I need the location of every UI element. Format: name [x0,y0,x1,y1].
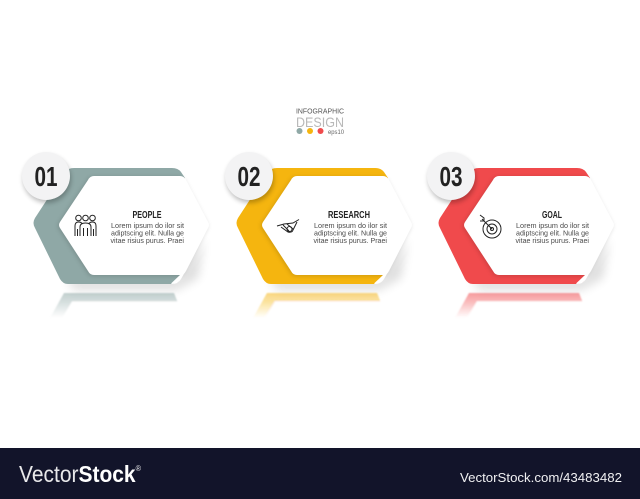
text block: research [314,221,388,245]
white lower rim [171,272,185,284]
footer bar [0,448,640,499]
reflection: goal [455,293,595,322]
card shadow: people [66,238,204,290]
heading: research: RESEARCH [328,209,370,221]
text block: people: vitae risius purus. Praei [110,236,184,245]
text block: research: vitae risius purus. Praei [314,236,387,245]
number badge: 02 [225,152,274,203]
icon: handshake [277,220,299,232]
heading: goal: GOAL [542,209,562,221]
text block: goal [516,221,590,245]
text block: research: adiptscing elit. Nulla ge [314,228,387,238]
reflection: people [50,293,190,322]
hexagon: teal backing [34,168,185,284]
card shadow: goal [471,238,609,290]
hexagon: white content [262,176,412,275]
text block: goal: vitae risius purus. Praei [516,236,589,245]
footer url: VectorStock.com/43483482 [460,470,622,485]
number badge: 03 [427,152,476,203]
hexagon: white content [59,176,209,275]
text block: goal: Lorem ipsum do ilor sit [516,221,590,230]
title: infographic design: eps10 [328,129,344,136]
number badge: 02: 02 [238,161,260,192]
footer logo: ® [136,464,141,473]
number badge: 01 [22,152,71,203]
icon: target [480,215,501,238]
icon: people [75,215,96,236]
number badge: 03: 03 [440,161,462,192]
text block: people: Lorem ipsum do ilor sit [111,221,185,230]
card shadow: research [269,238,407,290]
hexagon: white content [464,176,614,275]
number badge: 01: 01 [34,161,58,192]
text block: research: Lorem ipsum do ilor sit [314,221,388,230]
hexagon: red backing [438,168,590,284]
text block: people: adiptscing elit. Nulla ge [111,228,184,238]
white lower rim [374,272,388,284]
text block: goal: adiptscing elit. Nulla ge [516,228,589,238]
hexagon: yellow backing [236,168,388,284]
panel: research [225,152,412,322]
white lower rim [576,272,590,284]
text block: people [110,221,185,245]
panel: people [22,152,209,322]
footer logo: VectorStock [19,461,141,487]
title: infographic design: INFOGRAPHIC [296,106,344,116]
title: infographic design [296,106,344,136]
title: infographic design: DESIGN [296,114,344,130]
panel: goal [427,152,614,322]
heading: people: PEOPLE [132,209,162,221]
reflection: research [253,293,393,322]
